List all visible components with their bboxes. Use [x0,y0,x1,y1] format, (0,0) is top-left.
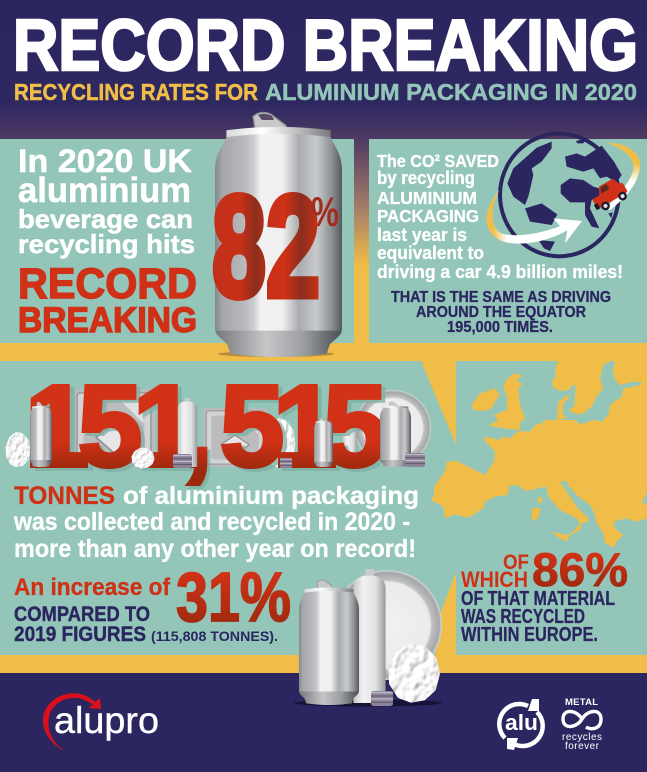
subtitle: ALUMINIUM PACKAGING IN 2020 [265,79,637,105]
figure: 151,515: 151,515 [30,364,391,494]
86 percent figure: 86% [532,543,628,596]
text: record breaking red [18,260,197,340]
text: increase of 31%: An increase of [14,574,171,601]
footer [0,673,647,772]
logo: metal recycles forever: METAL [565,697,598,708]
foil ball middle [131,447,155,469]
orbit arrow left [487,190,582,244]
coin stack 1 [173,454,192,468]
foil ball [388,643,440,703]
yellow wedge bottom [436,572,456,655]
coin stack 3 [405,453,425,467]
coin stack 2 [280,458,292,468]
text: of which 86%: WAS RECYCLED [461,606,585,628]
logo: alupro [43,693,159,751]
panel: UK beverage can recycling [0,139,354,343]
text: CO2 saved statement: PACKAGING [377,206,479,226]
text: CO2 saved statement [377,151,623,282]
text: tonnes collected [13,482,419,563]
foil ball right [265,418,295,468]
can right [380,402,411,467]
text: of which 86%: OF [503,551,529,574]
text: CO2 saved statement: equivalent to [377,243,484,263]
text: tonnes collected: more than any other year on record! [14,535,416,563]
logo: alu recycling: alu [505,710,538,735]
text: In 2020 UK aluminium beverage can recycling hits: recycling hits [18,229,195,259]
82 figure: 82 [212,166,320,327]
coin stack [371,691,393,706]
subtitle: RECYCLING RATES FOR [14,79,258,105]
infinity symbol [563,711,601,729]
bottom yellow band [0,655,647,673]
text: same as driving around the equator: AROUND THE EQUATOR [416,304,586,321]
panel: CO2 saved [369,134,647,343]
logo: alupro: alupro [54,700,159,741]
text: In 2020 UK aluminium beverage can recycling hits: In 2020 UK [18,143,192,179]
big can with 82 percent [212,112,342,357]
subtitle [14,79,637,105]
text: same as driving around the equator: 195,000 TIMES. [447,319,553,336]
spray can [178,398,197,467]
orbit arrow right [605,143,640,210]
yellow wedge top [421,361,456,445]
foil ball left [6,432,30,467]
spray bottle [353,569,386,703]
text: of which 86%: WITHIN EUROPE. [461,624,598,646]
text: record breaking red: RECORD [18,260,197,308]
text: In 2020 UK aluminium beverage can recycling hits [18,143,195,259]
logo: metal recycles forever [562,697,602,752]
can tab opening [258,114,274,120]
text: record breaking red: BREAKING [18,301,197,340]
text: In 2020 UK aluminium beverage can recycling hits: aluminium [18,171,191,210]
packaging group at the bottom [294,569,442,706]
text: of which 86%: WHICH [461,567,528,592]
text: same as driving around the equator [391,289,611,336]
text: of which 86% [461,543,628,646]
logo: alu recycling [499,699,543,750]
panel: lower teal section [0,361,647,655]
plate [332,570,442,680]
can mid [314,418,333,467]
text: CO2 saved statement: last year is [377,225,467,245]
text: CO2 saved statement: by recycling [377,168,475,188]
can [299,580,359,705]
packaging objects in front of the number [6,398,425,469]
text: increase of 31% [14,558,291,646]
can left [30,402,52,467]
packaging objects behind the number [73,389,431,468]
text: CO2 saved statement: The CO² SAVED [377,151,499,171]
small bottle [343,427,357,467]
aluminium plate [355,390,431,466]
map of Europe [431,361,647,548]
logo: metal recycles forever: forever [565,741,600,752]
text: tonnes collected: of aluminium packaging [123,482,419,510]
logo: metal recycles forever: recycles [562,732,602,743]
text: tonnes collected: TONNES [14,482,115,510]
percent sign: % [311,188,339,235]
large tray [73,389,155,467]
text: CO2 saved statement: ALUMINIUM [377,188,477,208]
icon: red car [587,175,631,215]
text: In 2020 UK aluminium beverage can recycling hits: beverage can [18,204,193,234]
text: increase of 31%: COMPARED TO [14,603,150,626]
figure: 151,515: 151,515 [25,361,387,491]
text: increase of 31%: 2019 FIGURES [14,623,146,646]
text: increase of 31%: (115,808 TONNES). [151,628,278,644]
globe with orbiting car [487,134,640,256]
text: tonnes collected: was collected and recycled in 2020 - [13,508,410,536]
text: same as driving around the equator: THAT IS THE SAME AS DRIVING [391,289,611,306]
header background gradient [0,0,647,361]
31 percent figure: 31% [176,558,291,636]
small tray [203,408,267,467]
text: CO2 saved statement: driving a car 4.9 billion miles! [377,262,623,282]
